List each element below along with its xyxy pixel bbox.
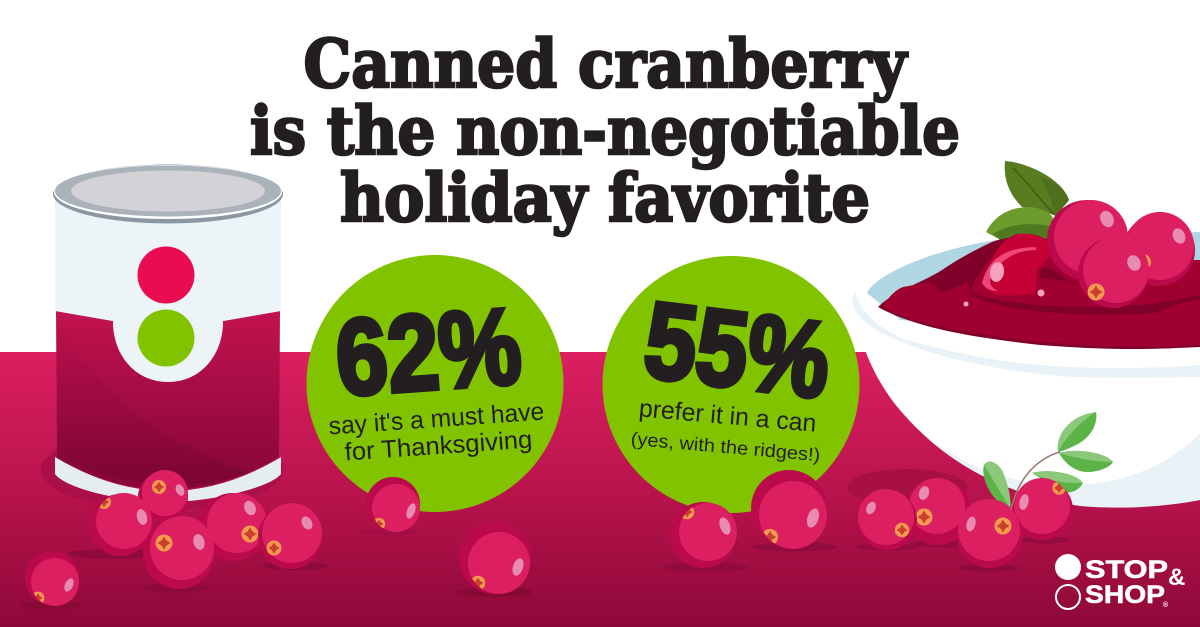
caption: in a can: (yes, with the ridges!) [630,428,821,465]
logo: Stop & Shop: ® [1163,601,1169,609]
cranberries: under 55% circle [663,470,837,572]
group shadow [847,469,967,505]
title: Canned cranberry [304,25,908,103]
logo: Stop & Shop: SHOP [1085,581,1165,609]
top berries [1047,200,1195,308]
title: is the non-negotiable [250,92,960,170]
label dot: green [138,310,194,366]
sauce highlights [964,261,1044,306]
number: 55%: 55% [638,278,837,421]
bowl of cranberry sauce [852,161,1200,508]
logo: Stop & Shop: & [1168,564,1185,591]
caption: must have: for Thanksgiving [344,425,533,467]
can lid [53,164,283,224]
sauce [878,237,1200,349]
bowl rim shadow [852,292,1200,378]
cranberry pile: left [20,470,328,609]
sprig leaves [983,412,1113,508]
stat circle: 62% [306,255,564,512]
table background [0,352,1200,627]
dark green leaves [986,161,1069,240]
caption: must have [328,398,545,467]
title [250,25,960,237]
caption: in a can [630,394,821,465]
logo: Stop & Shop [1055,554,1185,609]
bowl body [852,300,1200,508]
label dot: red [138,246,194,304]
logo: Stop & Shop: STOP [1085,556,1168,584]
title: holiday favorite [340,159,870,237]
bowl inner [867,232,1200,340]
caption: must have: say it's a must have [328,398,545,441]
sauce mound [982,234,1055,296]
cranberries and sprig: right [847,412,1113,572]
can shadow [41,430,283,510]
sprig stem [1011,452,1060,510]
number: 62%: 62% [332,285,525,418]
caption: in a can: prefer it in a can [638,394,818,438]
cranberries: middle [361,477,533,597]
icon: cranberry can [53,164,283,502]
stat circle: 55% [602,256,860,513]
